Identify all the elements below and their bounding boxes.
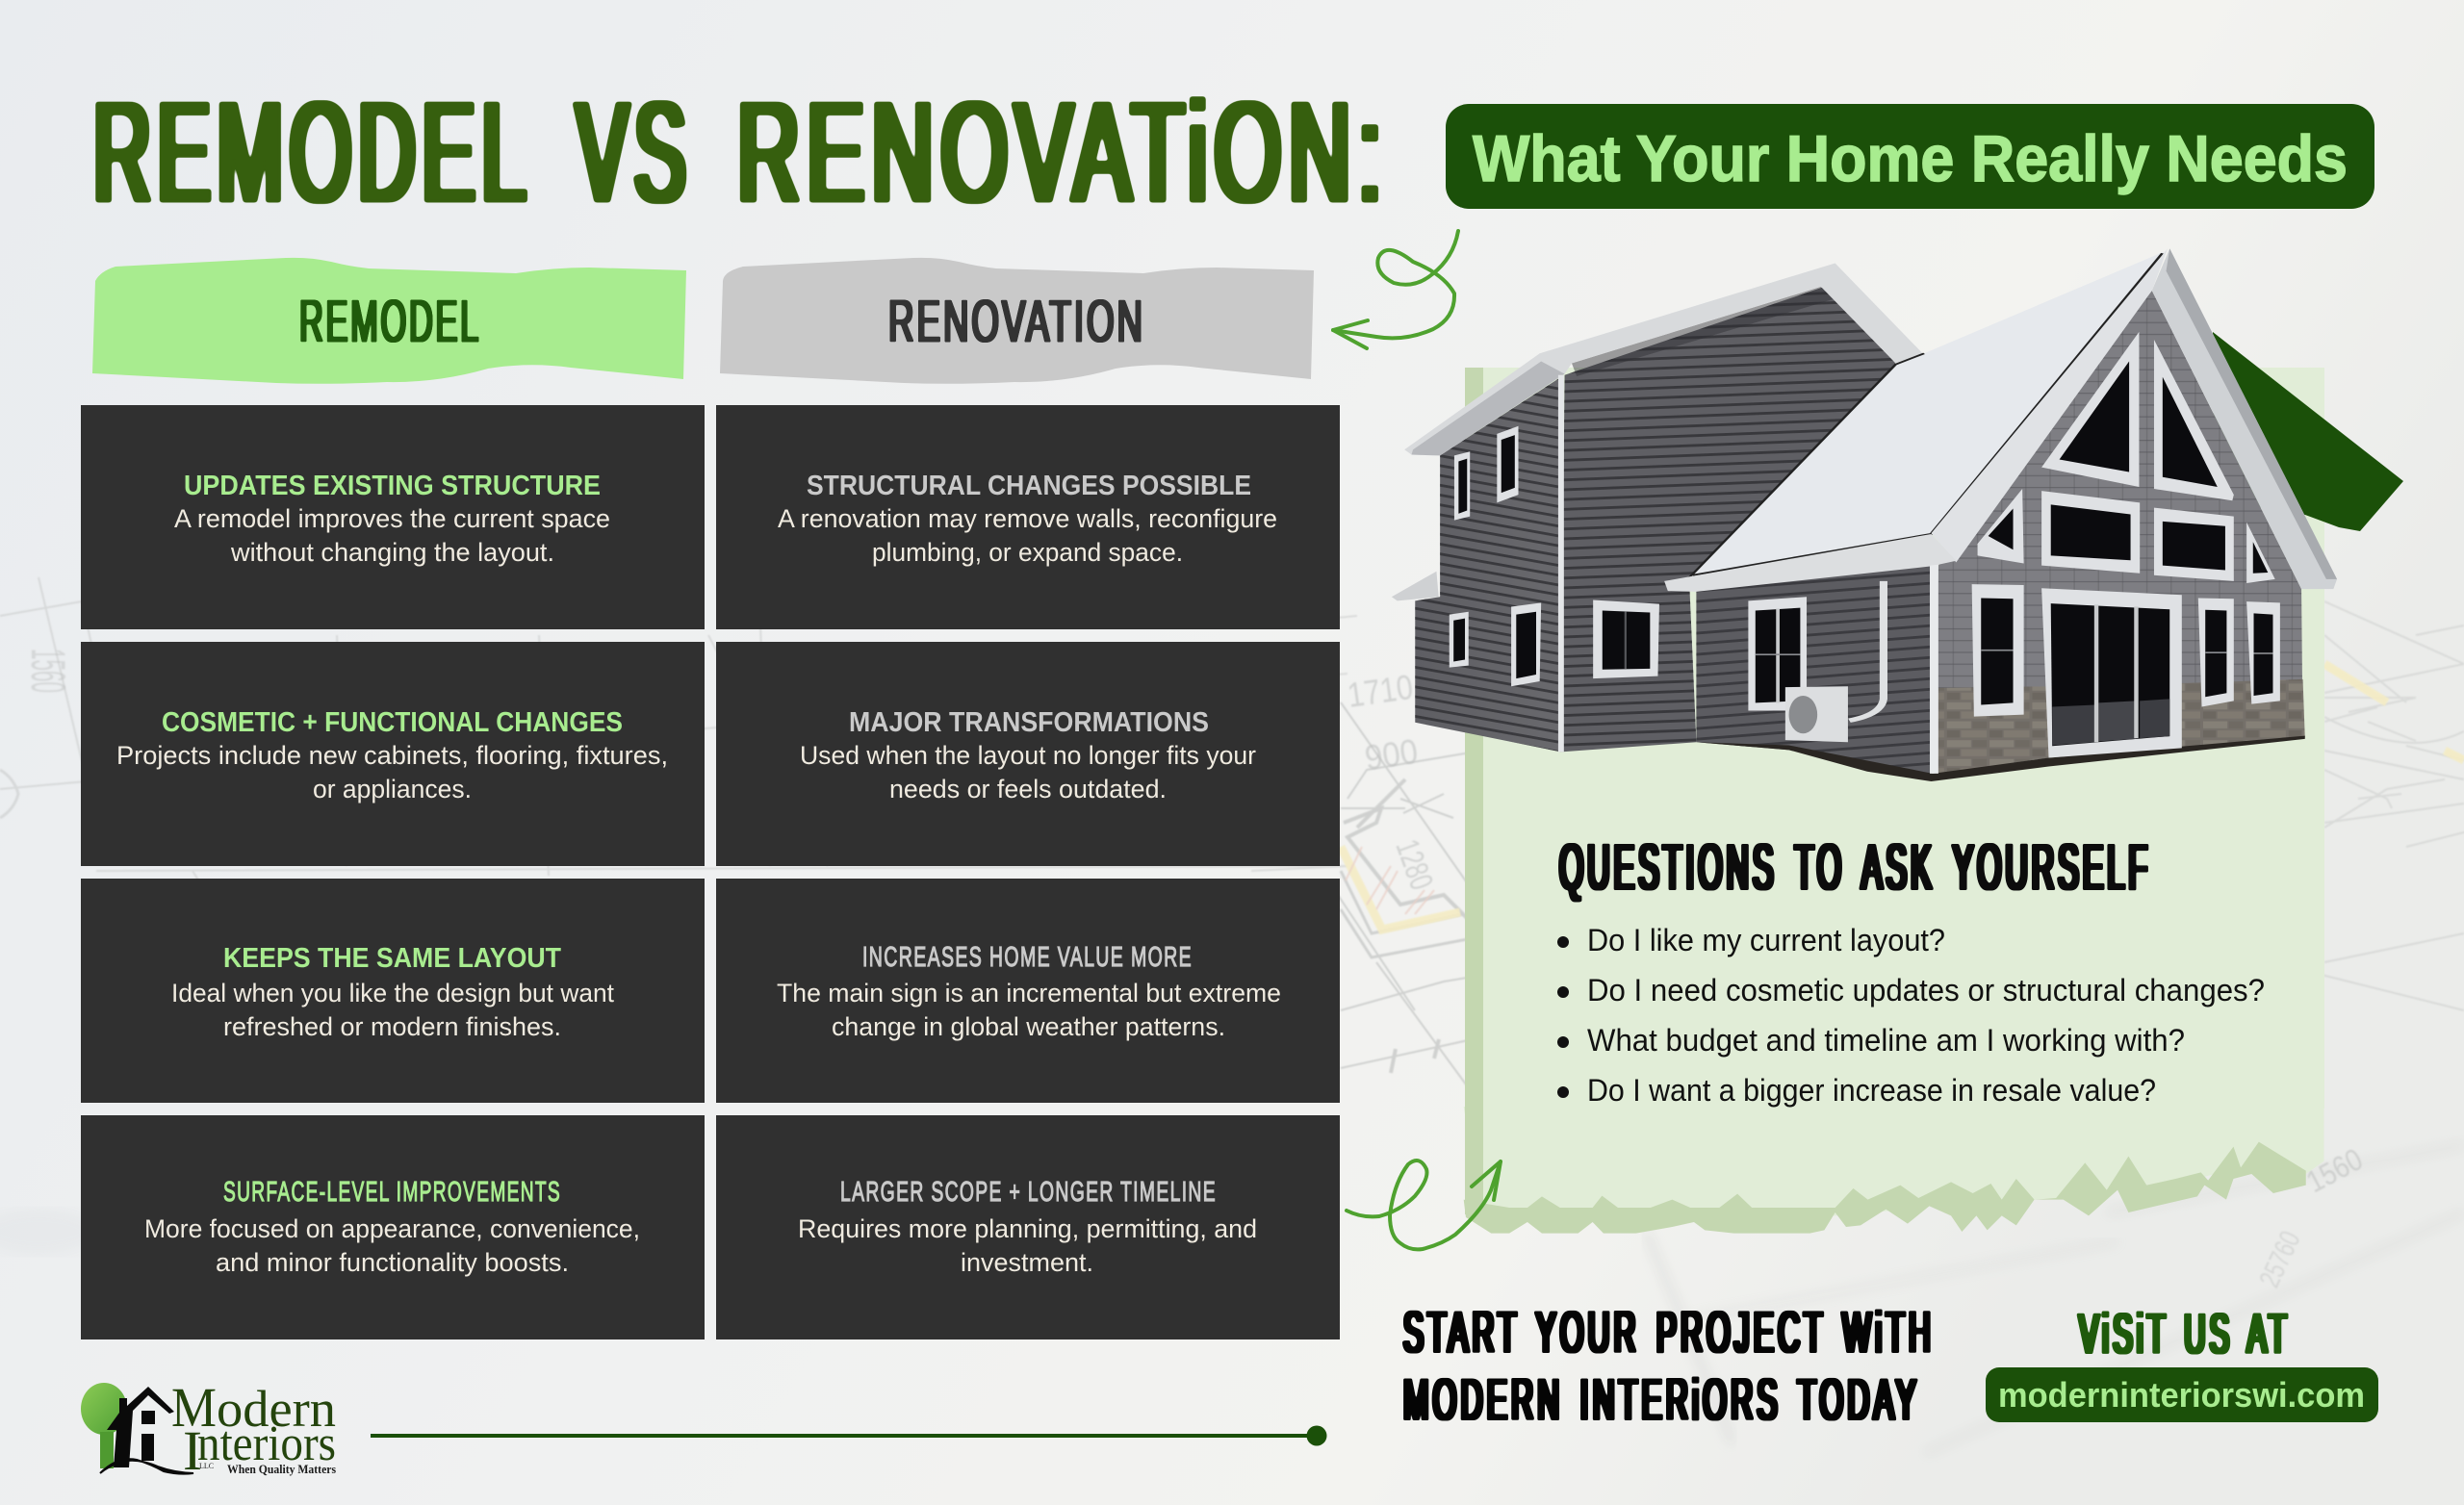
website pill: moderninteriorswi.com — [1998, 1375, 2365, 1415]
card: major transformations — [716, 642, 1340, 866]
card: larger scope and longer timeline — [716, 1115, 1340, 1339]
card: surface-level improvements — [81, 1115, 705, 1339]
card: surface-level improvements: and minor functionality boosts. — [216, 1248, 569, 1277]
card: updates existing structure: UPDATES EXISTING STRUCTURE — [184, 471, 601, 501]
renovation column header — [720, 258, 1314, 384]
card: keeps the same layout: Ideal when you like the design but want — [171, 979, 614, 1008]
remodel column header: REMODEL — [299, 289, 481, 355]
foundation shadow — [1696, 736, 2305, 781]
website pill — [1986, 1367, 2378, 1422]
question list — [1557, 923, 2265, 1108]
card: structural changes possible — [716, 405, 1340, 629]
background: blueprint paper: 1280 — [1388, 835, 1440, 895]
card: major transformations: Used when the layout no longer fits your — [800, 741, 1256, 770]
logo wordmark: odern — [217, 1380, 336, 1438]
card: major transformations: MAJOR TRANSFORMATIONS — [849, 707, 1209, 738]
background: blueprint paper: 900 — [1362, 731, 1421, 778]
card: major transformations: needs or feels outdated. — [889, 775, 1167, 804]
upper roof eave — [1404, 263, 1923, 455]
arrow: swirl pointing to renovation header — [1333, 231, 1458, 348]
windows — [1450, 332, 2280, 758]
card: increases home value more — [716, 879, 1340, 1103]
card: cosmetic and functional changes: COSMETIC + FUNCTIONAL CHANGES — [162, 707, 623, 738]
card: structural changes possible: plumbing, or expand space. — [872, 538, 1183, 567]
renovation column header: RENOVATION — [888, 289, 1145, 355]
snow roof — [1688, 251, 2165, 579]
title: REMODEL — [93, 73, 532, 232]
card: structural changes possible: A renovation may remove walls, reconfigure — [778, 504, 1277, 533]
background: blueprint paper: 1710 — [1345, 667, 1415, 715]
side bump roof — [1392, 572, 1439, 600]
panel background — [1464, 368, 2324, 1234]
remodel column header — [92, 258, 686, 384]
subtitle pill — [1446, 104, 2374, 209]
logo house — [100, 1387, 193, 1474]
question list: Do I need cosmetic updates or structural changes? — [1587, 973, 2265, 1008]
card: cosmetic and functional changes: Projects include new cabinets, flooring, fixtures, — [116, 741, 668, 770]
card: updates existing structure: A remodel improves the current space — [174, 504, 610, 533]
left wall — [1415, 377, 1561, 752]
logo: modern interiors — [81, 1376, 336, 1482]
lower eave — [1664, 534, 1956, 592]
card: keeps the same layout: KEEPS THE SAME LAYOUT — [223, 943, 561, 974]
call to action text — [1403, 1300, 1935, 1432]
gable rake trim — [1931, 248, 2168, 562]
corner trim — [1930, 565, 1938, 774]
card: larger scope and longer timeline: Requires more planning, permitting, and — [798, 1214, 1257, 1243]
card: keeps the same layout: refreshed or modern finishes. — [223, 1012, 561, 1041]
subtitle pill: What Your Home Really Needs — [1473, 122, 2348, 195]
question list: Do I want a bigger increase in resale value? — [1587, 1073, 2156, 1108]
front gable wall — [1935, 291, 2303, 775]
card: increases home value more: The main sign is an incremental but extreme — [777, 979, 1281, 1008]
question list: What budget and timeline am I working with? — [1587, 1023, 2185, 1058]
logo wordmark: When Quality Matters — [227, 1462, 336, 1476]
title: VS — [577, 73, 692, 232]
logo wordmark: I — [183, 1419, 202, 1482]
title — [93, 73, 1389, 232]
background: blueprint paper: 1560 — [2300, 1141, 2368, 1199]
house illustration — [1392, 248, 2337, 781]
logo wordmark: nteriors — [197, 1416, 336, 1471]
card: surface-level improvements: More focused on appearance, convenience, — [144, 1214, 640, 1243]
dark green accent behind house — [2213, 332, 2403, 531]
card: larger scope and longer timeline: LARGER SCOPE + LONGER TIMELINE — [840, 1177, 1217, 1208]
logo wordmark: LLC — [199, 1462, 214, 1470]
stone base — [1937, 686, 2049, 774]
card: cosmetic and functional changes — [81, 642, 705, 866]
ac unit — [1785, 686, 1848, 742]
call to action text: MODERN INTERiORS TODAY — [1403, 1367, 1920, 1432]
logo wordmark — [171, 1376, 336, 1482]
question list: Do I like my current layout? — [1587, 923, 1945, 957]
questions panel — [1464, 368, 2324, 1234]
card: cosmetic and functional changes: or appliances. — [313, 775, 472, 804]
background: blueprint paper: 25760 — [2253, 1227, 2307, 1292]
logo wordmark: M — [171, 1376, 217, 1439]
downpipe — [1849, 581, 1884, 721]
card: structural changes possible: STRUCTURAL CHANGES POSSIBLE — [807, 471, 1251, 501]
tall gable wall — [1561, 287, 1895, 752]
card: larger scope and longer timeline: investment. — [961, 1248, 1093, 1277]
title: RENOVATiON: — [737, 73, 1389, 232]
footer connector line — [371, 1426, 1326, 1445]
comparison cards — [81, 405, 1340, 1339]
card: updates existing structure: without changing the layout. — [230, 538, 554, 567]
card: updates existing structure — [81, 405, 705, 629]
lower wing wall — [1696, 566, 1931, 774]
card: keeps the same layout — [81, 879, 705, 1103]
call to action text: START YOUR PROJECT WiTH — [1403, 1300, 1935, 1365]
card: increases home value more: change in global weather patterns. — [832, 1012, 1225, 1041]
logo tree — [81, 1383, 127, 1468]
card: increases home value more: INCREASES HOME VALUE MORE — [862, 942, 1193, 973]
background: blueprint paper: 1560 — [21, 649, 75, 693]
arrow: swirl pointing to questions panel — [1347, 1161, 1501, 1249]
card: surface-level improvements: SURFACE-LEVEL IMPROVEMENTS — [223, 1177, 561, 1208]
